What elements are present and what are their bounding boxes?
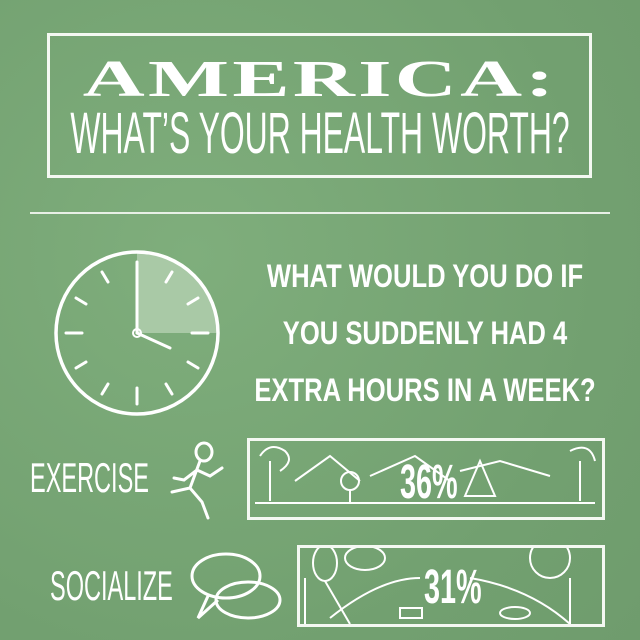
question text: YOU SUDDENLY HAD 4 xyxy=(283,315,567,351)
label: exercise: EXERCISE xyxy=(30,454,149,501)
panel: socialize 31% xyxy=(297,545,605,627)
question text xyxy=(254,258,596,408)
icon: clock xyxy=(54,250,220,416)
icon: speech bubbles xyxy=(190,552,282,620)
subtitle: WHAT’S YOUR HEALTH WORTH? xyxy=(70,101,569,166)
question text: WHAT WOULD YOU DO IF xyxy=(267,258,583,294)
title: AMERICA: AMERICA: xyxy=(82,51,557,108)
panel: exercise 36% xyxy=(247,438,605,520)
title box xyxy=(47,33,592,178)
icon: runner xyxy=(170,442,224,520)
question text: EXTRA HOURS IN A WEEK? xyxy=(254,372,596,408)
label: socialize: SOCIALIZE xyxy=(50,562,173,609)
panel: exercise 36%: 36% xyxy=(400,456,458,509)
panel: socialize 31%: 31% xyxy=(424,561,482,614)
